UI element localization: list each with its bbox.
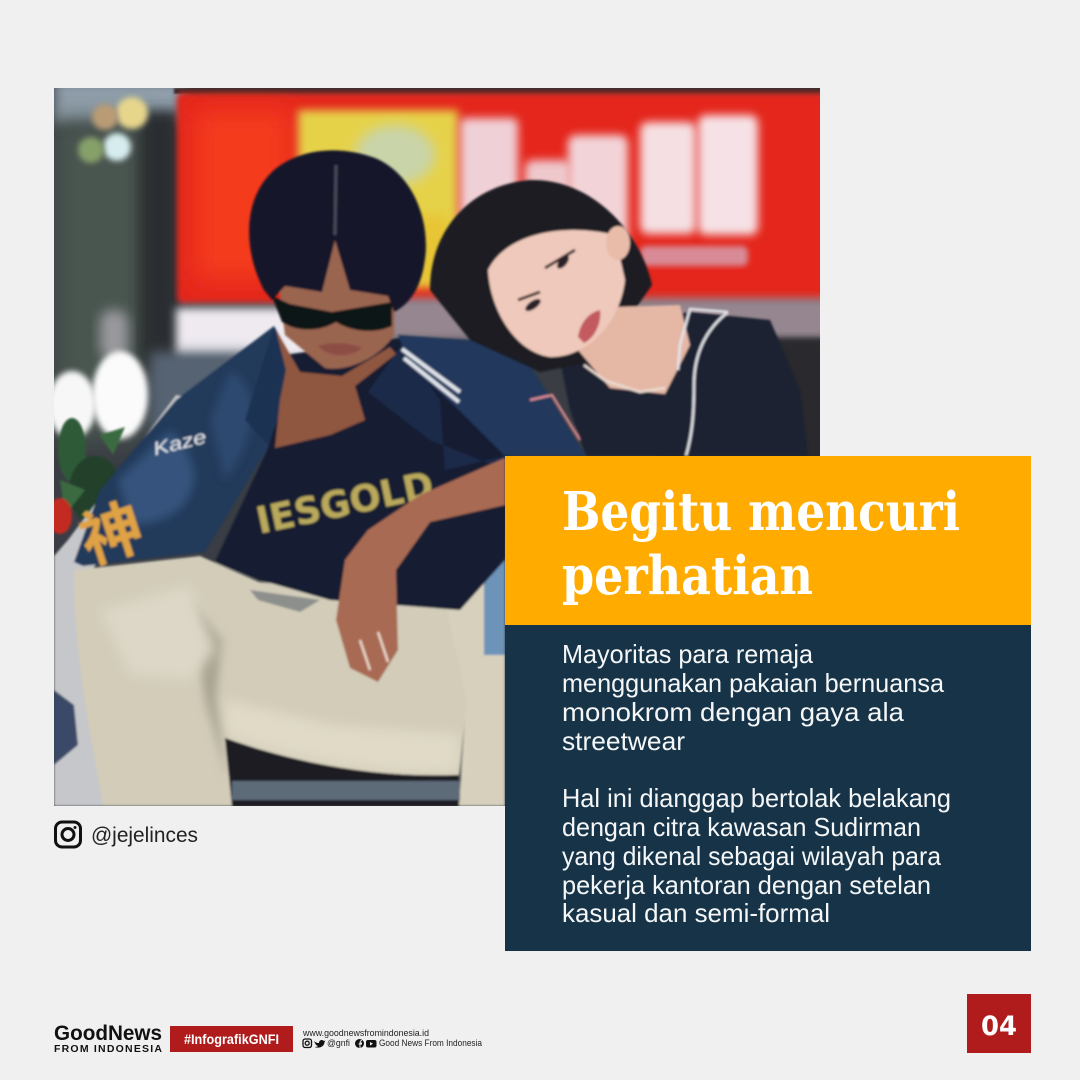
photo: couple in streetwear at night — [48, 80, 837, 806]
boy: arm resting on knee — [336, 458, 505, 682]
boy: dark shirt with gold lettering: IESGOLD — [252, 463, 437, 543]
boy: face and sunglasses — [249, 150, 426, 369]
logo: GoodNews From Indonesia: GoodNews — [54, 1021, 162, 1045]
people, softened — [54, 150, 808, 806]
hashtag badge — [170, 1026, 293, 1052]
website and social handles: www.goodnewsfromindonesia.id — [302, 1028, 429, 1039]
paragraph 2: yang dikenal sebagai wilayah para — [562, 841, 942, 871]
paragraph 2: Hal ini dianggap bertolak belakang — [562, 783, 951, 813]
icon: facebook — [355, 1039, 364, 1048]
boy: white jacket lining — [54, 394, 183, 806]
page number badge: 04 — [981, 1011, 1017, 1042]
website and social handles: @gnfi — [327, 1038, 350, 1048]
boy: dark shirt with gold lettering — [215, 338, 510, 610]
logo: GoodNews From Indonesia — [54, 1021, 162, 1055]
website and social handles: Good News From Indonesia — [379, 1038, 482, 1048]
heading: perhatian — [562, 545, 813, 607]
logo: GoodNews From Indonesia: FROM INDONESIA — [54, 1043, 162, 1055]
heading: Begitu mencuri — [562, 481, 960, 543]
paragraph 2: kasual dan semi-formal — [562, 898, 830, 928]
paragraph 1: monokrom dengan gaya ala — [562, 697, 905, 727]
boy: jacket sleeves: 神 — [67, 477, 154, 581]
photo credit: @jejelinces — [91, 824, 198, 847]
boy: jacket sleeves: Kaze — [151, 427, 209, 460]
panel: navy body text — [505, 625, 1031, 951]
paragraph 1: streetwear — [562, 726, 685, 756]
paragraph 1: menggunakan pakaian bernuansa — [562, 668, 945, 698]
page number badge — [967, 994, 1031, 1053]
hashtag badge: #InfografikGNFI — [184, 1032, 279, 1047]
paragraph 2 — [562, 783, 951, 928]
icon: instagram — [56, 822, 80, 847]
boy: jacket sleeves — [67, 326, 586, 581]
boy: trousers — [74, 554, 505, 806]
icon: twitter — [314, 1040, 326, 1048]
girl — [430, 180, 808, 456]
boy: hand on chin — [275, 330, 396, 448]
heading — [562, 481, 960, 607]
icon: instagram small — [303, 1039, 312, 1048]
paragraph 1: Mayoritas para remaja — [562, 639, 814, 669]
website and social handles — [302, 1028, 482, 1048]
paragraph 2: dengan citra kawasan Sudirman — [562, 812, 921, 842]
icon: youtube — [366, 1040, 376, 1048]
paragraph 1 — [562, 639, 945, 756]
photo credit — [56, 822, 198, 847]
photo backdrop: blurred city lights and red sign — [48, 80, 837, 806]
panel: orange heading — [505, 456, 1031, 625]
foliage and red flower — [48, 418, 125, 534]
lining pattern — [54, 690, 78, 765]
paragraph 2: pekerja kantoran dengan setelan — [562, 870, 931, 900]
